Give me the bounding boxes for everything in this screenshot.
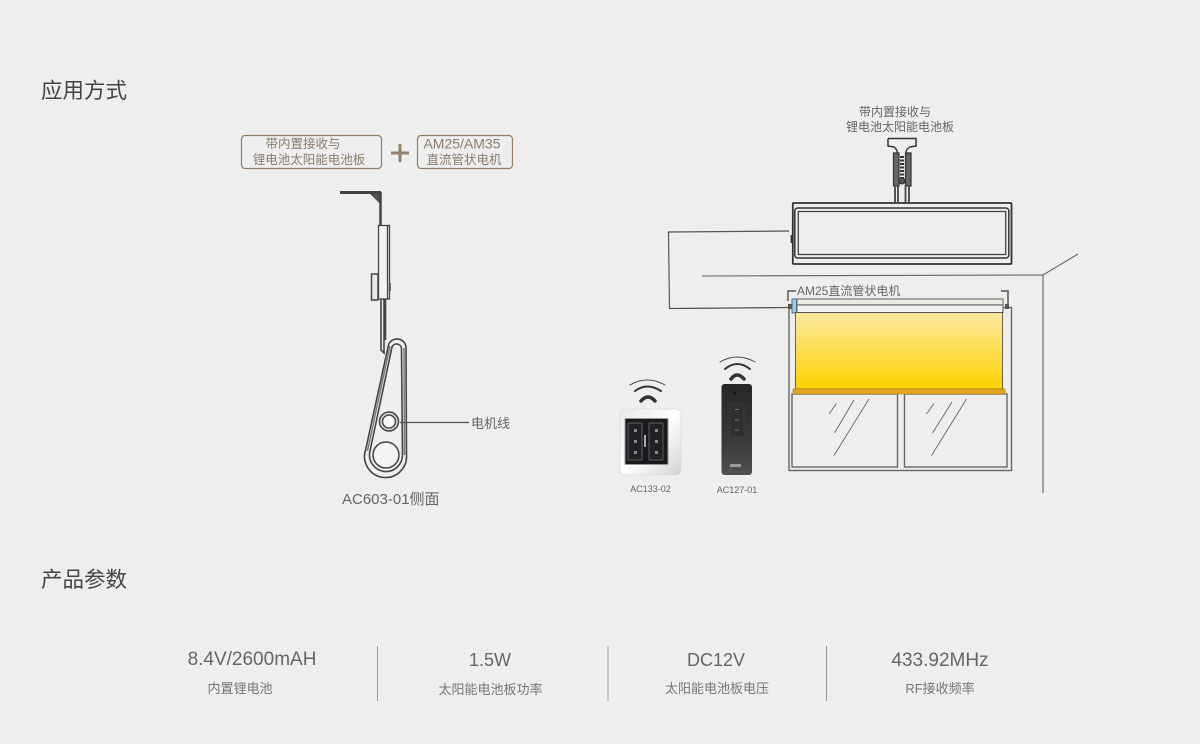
remote buttons bbox=[730, 392, 744, 467]
label box: tubular motor: AM25/AM35 bbox=[423, 136, 501, 152]
parameter: panel power bbox=[438, 650, 543, 697]
parameter: battery: 内置锂电池 bbox=[207, 681, 273, 696]
heading: application method: 应用方式 bbox=[41, 79, 127, 103]
label box: solar panel with receiver and battery bbox=[242, 136, 382, 168]
parameter: panel power: 太阳能电池板功率 bbox=[438, 682, 543, 697]
side view drawing: AC603-01 bbox=[340, 192, 469, 478]
installation diagram bbox=[668, 104, 1078, 493]
remote body bbox=[722, 384, 752, 475]
caption: AC133-02: AC133-02 bbox=[630, 484, 671, 494]
icon: plus sign bbox=[391, 144, 409, 162]
solar panel front bbox=[792, 203, 1012, 264]
top bracket bbox=[340, 192, 381, 225]
parameter: panel power: 1.5W bbox=[469, 650, 511, 670]
handheld remote AC127-01 bbox=[720, 357, 755, 475]
room wall lines bbox=[702, 254, 1078, 493]
wall switch AC133-02 bbox=[620, 380, 681, 475]
parameter: panel voltage: 太阳能电池板电压 bbox=[665, 681, 769, 696]
teardrop clamp bbox=[365, 339, 407, 478]
label: solar panel with receiver: 锂电池太阳能电池板 bbox=[846, 119, 954, 134]
glass reflections bbox=[829, 399, 966, 456]
roller blind fabric bbox=[796, 312, 1002, 389]
parameter: battery: 8.4V/2600mAH bbox=[188, 649, 316, 670]
blind bottom bar bbox=[793, 389, 1005, 394]
label box: tubular motor bbox=[418, 136, 512, 168]
parameter: frequency: 433.92MHz bbox=[891, 650, 989, 671]
heading: product parameters: 产品参数 bbox=[41, 568, 127, 592]
formula: solar panel plus motor bbox=[242, 136, 512, 168]
parameter: battery bbox=[188, 649, 316, 696]
icon: wireless signal bbox=[630, 380, 665, 401]
label: motor cable: 电机线 bbox=[471, 416, 510, 431]
label: solar panel with receiver bbox=[846, 104, 954, 134]
parameter: frequency bbox=[891, 650, 989, 696]
parameter: panel voltage: DC12V bbox=[687, 650, 745, 670]
label box: solar panel with receiver and battery: 带内置接收与 bbox=[265, 136, 341, 151]
support rods bbox=[381, 299, 386, 353]
solar panel mount bbox=[888, 138, 916, 202]
parameter: panel voltage bbox=[665, 650, 769, 696]
label: solar panel with receiver: 带内置接收与 bbox=[859, 104, 931, 119]
roller tube and brackets bbox=[788, 291, 1009, 313]
black keypad bbox=[625, 418, 668, 464]
leader line to motor cable bbox=[400, 422, 469, 424]
connecting cable bbox=[668, 231, 789, 308]
icon: wireless signal bbox=[720, 357, 755, 379]
panel body bbox=[372, 226, 390, 300]
label: AM25 motor: AM25直流管状电机 bbox=[797, 283, 900, 298]
caption: AC127-01: AC127-01 bbox=[717, 485, 757, 495]
window frame bbox=[789, 308, 1012, 470]
parameter: frequency: RF接收频率 bbox=[905, 681, 975, 696]
caption: AC603-01 side view: AC603-01侧面 bbox=[342, 491, 440, 508]
switch plate bbox=[620, 409, 681, 475]
label box: solar panel with receiver and battery: 锂电池太阳能电池板 bbox=[253, 152, 366, 167]
label box: tubular motor: 直流管状电机 bbox=[426, 152, 502, 167]
